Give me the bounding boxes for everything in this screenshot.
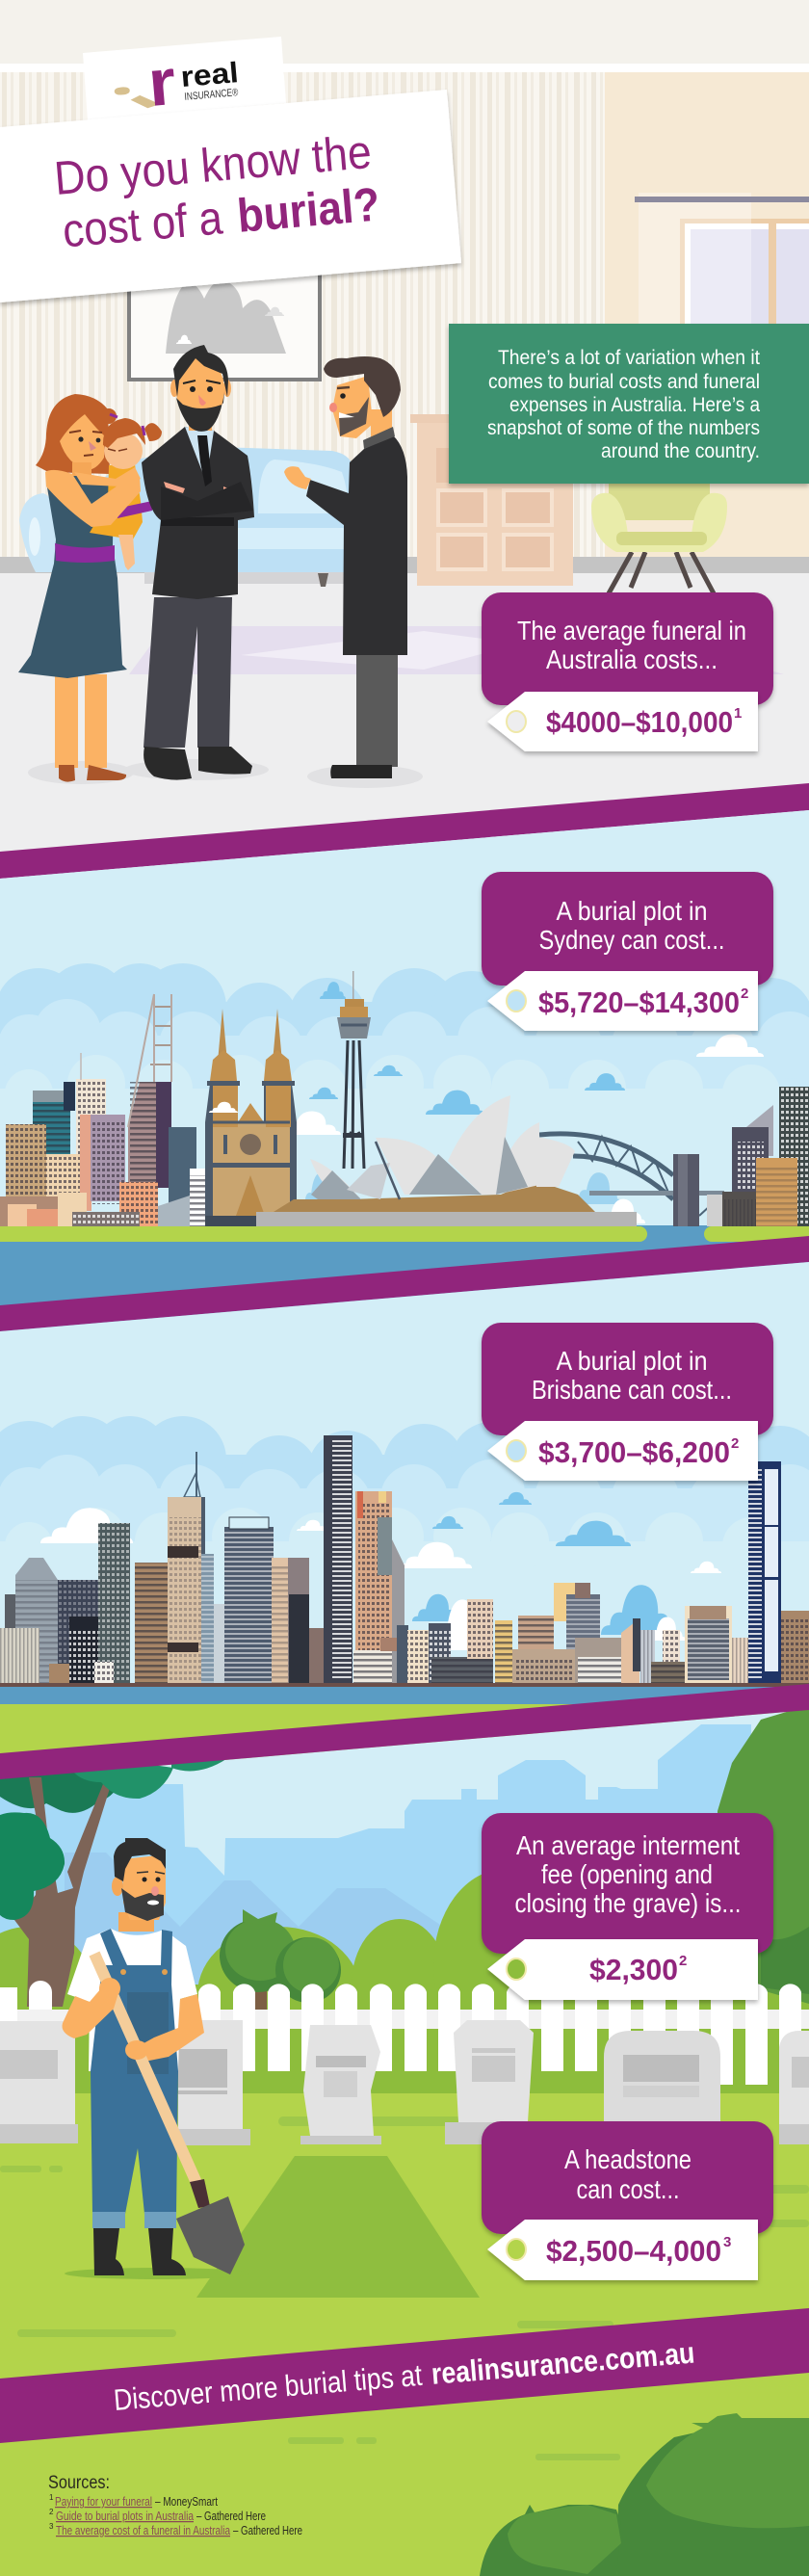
open grave bbox=[196, 2156, 480, 2298]
picket fence bbox=[0, 1981, 809, 2085]
gardener with shovel bbox=[62, 1838, 249, 2279]
right city towers bbox=[707, 1087, 809, 1226]
person: grieving woman holding child bbox=[18, 394, 162, 782]
Sydney Opera House bbox=[256, 1095, 637, 1226]
bushes: lower right bbox=[480, 2413, 809, 2576]
price tag: 2 bbox=[679, 1953, 687, 1969]
river and far bank bbox=[0, 1683, 809, 1791]
scene: Sydney skyline bbox=[0, 810, 809, 1346]
left city towers bbox=[0, 994, 210, 1226]
sources: 2 bbox=[49, 2508, 54, 2516]
price tag bbox=[487, 971, 758, 1031]
shrubs bbox=[220, 1909, 341, 2013]
intro text box: snapshot of some of the numbers bbox=[487, 417, 760, 439]
green hills bbox=[0, 1869, 809, 2093]
headstone 6 bbox=[779, 2031, 809, 2144]
price tag: 3 bbox=[723, 2234, 731, 2250]
intro text box bbox=[449, 324, 809, 484]
sofa bbox=[19, 448, 353, 587]
scene: Brisbane skyline bbox=[0, 1262, 809, 1794]
low-rise buildings bbox=[397, 1461, 809, 1683]
sources: Guide to burial plots in Australia bbox=[56, 2510, 194, 2523]
callout: interment fee: fee (opening and bbox=[541, 1859, 713, 1889]
sources: Paying for your funeral bbox=[55, 2495, 152, 2509]
callout: Sydney burial plot: A burial plot in bbox=[557, 896, 707, 926]
scene: cemetery bbox=[0, 1705, 809, 2576]
sources: – Gathered Here bbox=[233, 2524, 302, 2537]
wall picture of mountains bbox=[129, 241, 320, 380]
callout: Sydney burial plot: Sydney can cost... bbox=[539, 925, 724, 955]
intro text box: expenses in Australia. Here’s a bbox=[509, 394, 760, 416]
armchair bbox=[591, 472, 727, 593]
callout: average funeral cost bbox=[482, 592, 773, 751]
price tag bbox=[487, 1421, 758, 1481]
price tag: $2,300 bbox=[589, 1953, 678, 1986]
person: funeral director in long coat bbox=[284, 356, 407, 778]
sources bbox=[48, 2473, 302, 2537]
logo card bbox=[83, 37, 286, 123]
headstone 3 bbox=[300, 2025, 381, 2144]
high-rise towers bbox=[0, 1435, 407, 1684]
intro text box: around the country. bbox=[601, 440, 760, 462]
intro text box: comes to burial costs and funeral bbox=[488, 371, 760, 393]
headstones bbox=[0, 2020, 809, 2145]
small clouds bbox=[40, 1492, 721, 1650]
callout: headstone cost bbox=[482, 2121, 773, 2280]
Sydney Tower bbox=[337, 971, 371, 1169]
divider band 2 bbox=[0, 1236, 809, 1331]
callout: interment fee: An average interment bbox=[516, 1830, 740, 1860]
price tag: 1 bbox=[734, 705, 742, 722]
sources: Sources: bbox=[48, 2473, 110, 2493]
layered clouds bbox=[0, 963, 809, 1137]
tree: right side bbox=[718, 1705, 809, 2004]
heading: Do you know the bbox=[52, 126, 374, 205]
price tag: 2 bbox=[741, 986, 748, 1002]
nearer city silhouette bbox=[65, 1853, 482, 1994]
price tag: $2,500–4,000 bbox=[546, 2234, 721, 2268]
heading: cost of a bbox=[61, 192, 225, 257]
logo: real insurance: INSURANCE® bbox=[184, 87, 239, 103]
logo: real insurance: r bbox=[145, 45, 178, 120]
callout: headstone cost: can cost... bbox=[576, 2174, 680, 2204]
sources: The average cost of a funeral in Australia bbox=[56, 2524, 230, 2537]
rug bbox=[129, 626, 784, 674]
headstone 2 bbox=[178, 2020, 250, 2145]
callout: headstone cost: A headstone bbox=[564, 2144, 692, 2174]
scene: funeral home interior bbox=[0, 0, 809, 886]
grass dashes bbox=[0, 2116, 809, 2460]
heading: burial? bbox=[235, 178, 381, 243]
callout: Brisbane burial plot: A burial plot in bbox=[557, 1346, 707, 1376]
price tag: $4000–$10,000 bbox=[546, 705, 733, 739]
price tag: $3,700–$6,200 bbox=[538, 1435, 730, 1469]
price tag: $5,720–$14,300 bbox=[538, 986, 740, 1019]
small clouds bbox=[278, 982, 764, 1223]
sources: – MoneySmart bbox=[155, 2495, 218, 2509]
floor shadows bbox=[28, 759, 423, 788]
callout: average funeral cost: Australia costs... bbox=[546, 644, 718, 674]
distant city silhouette bbox=[0, 1724, 751, 2023]
callout: Brisbane burial plot bbox=[482, 1323, 773, 1481]
price tag bbox=[487, 1939, 758, 2000]
Sydney Harbour Bridge bbox=[539, 1134, 724, 1226]
St Mary's cathedral bbox=[205, 1009, 297, 1226]
tree: left side bbox=[0, 1759, 226, 2007]
title card bbox=[0, 37, 461, 302]
price tag: 2 bbox=[731, 1435, 739, 1452]
divider band 3 bbox=[0, 1684, 809, 1779]
call to action band: Discover more burial tips at bbox=[113, 2358, 424, 2417]
divider band 1 bbox=[0, 783, 809, 879]
callout: average funeral cost: The average funeral in bbox=[517, 616, 746, 645]
heading bbox=[52, 126, 381, 258]
callout: interment fee bbox=[482, 1813, 773, 2000]
logo: real insurance: real bbox=[179, 57, 240, 93]
logo: real insurance bbox=[111, 39, 242, 123]
price tag bbox=[487, 692, 758, 751]
layered clouds bbox=[0, 1416, 809, 1590]
window with curtain bbox=[635, 193, 809, 328]
sideboard cabinet bbox=[410, 414, 580, 586]
intro text box: There’s a lot of variation when it bbox=[498, 347, 760, 369]
headstone 4 bbox=[445, 2020, 534, 2144]
lawn bbox=[0, 2093, 809, 2576]
headstone 1 bbox=[0, 2021, 78, 2143]
sources: – Gathered Here bbox=[196, 2510, 266, 2523]
callout: interment fee: closing the grave) is... bbox=[514, 1888, 742, 1918]
sources: 1 bbox=[49, 2493, 54, 2502]
headstone 5 bbox=[604, 2031, 720, 2129]
person: man in black suit with crossed arms bbox=[142, 345, 254, 780]
callout: Sydney burial plot bbox=[482, 872, 773, 1031]
water and ground bbox=[0, 1225, 809, 1346]
call to action band bbox=[0, 2308, 809, 2443]
call to action band: realinsurance.com.au bbox=[431, 2336, 696, 2391]
callout: Brisbane burial plot: Brisbane can cost... bbox=[532, 1375, 732, 1405]
sources: 3 bbox=[49, 2522, 54, 2531]
price tag bbox=[487, 2220, 758, 2280]
